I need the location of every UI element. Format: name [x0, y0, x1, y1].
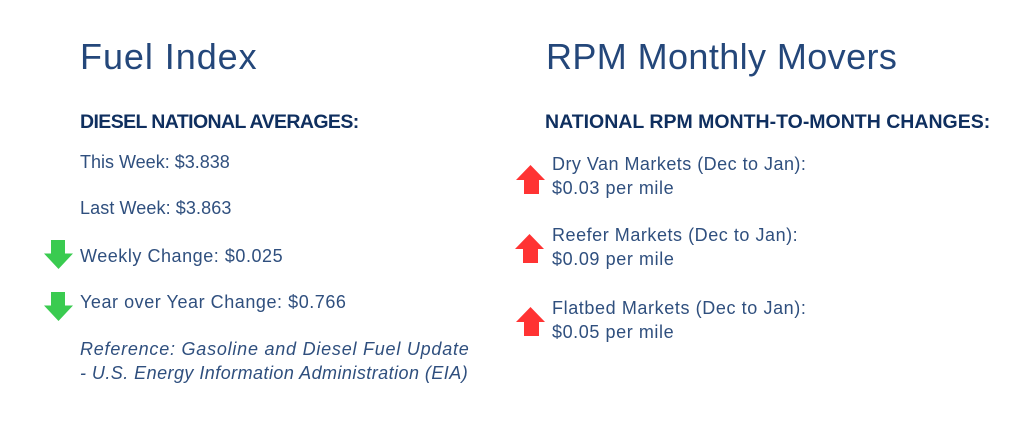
text: dry van markets: Dry Van Markets (Dec to Jan): — [552, 154, 806, 174]
text: reference: Reference: Gasoline and Diesel Fuel Update — [80, 339, 470, 359]
text: year over year change: Year over Year Change: $0.766 — [80, 292, 346, 312]
text: flatbed markets: Flatbed Markets (Dec to Jan): — [552, 298, 806, 318]
text: dry van markets: $0.03 per mile — [552, 178, 674, 198]
heading: national RPM changes: NATIONAL RPM MONTH-TO-MONTH CHANGES: — [545, 111, 990, 133]
text: reference — [80, 339, 470, 383]
text: flatbed markets: $0.05 per mile — [552, 322, 674, 342]
icon: green down arrow yearly — [44, 292, 73, 321]
text: weekly change: Weekly Change: $0.025 — [80, 246, 283, 266]
title: Fuel Index: Fuel Index — [80, 36, 258, 77]
text: reefer markets: Reefer Markets (Dec to Jan): — [552, 225, 798, 245]
title: RPM Monthly Movers: RPM Monthly Movers — [546, 36, 897, 77]
icon: red up arrow reefer — [515, 234, 544, 263]
text: reefer markets: $0.09 per mile — [552, 249, 674, 269]
text: reefer markets — [552, 225, 798, 269]
text: dry van markets — [552, 154, 806, 198]
icon: green down arrow weekly — [44, 240, 73, 269]
text: this week: This Week: $3.838 — [80, 152, 230, 172]
heading: diesel national averages: DIESEL NATIONAL AVERAGES: — [80, 111, 359, 133]
text: last week: Last Week: $3.863 — [80, 198, 231, 218]
icon: red up arrow dry van — [516, 165, 545, 194]
icon: red up arrow flatbed — [516, 307, 545, 336]
text: reference: - U.S. Energy Information Administration (EIA) — [80, 362, 468, 382]
text: flatbed markets — [552, 298, 806, 342]
